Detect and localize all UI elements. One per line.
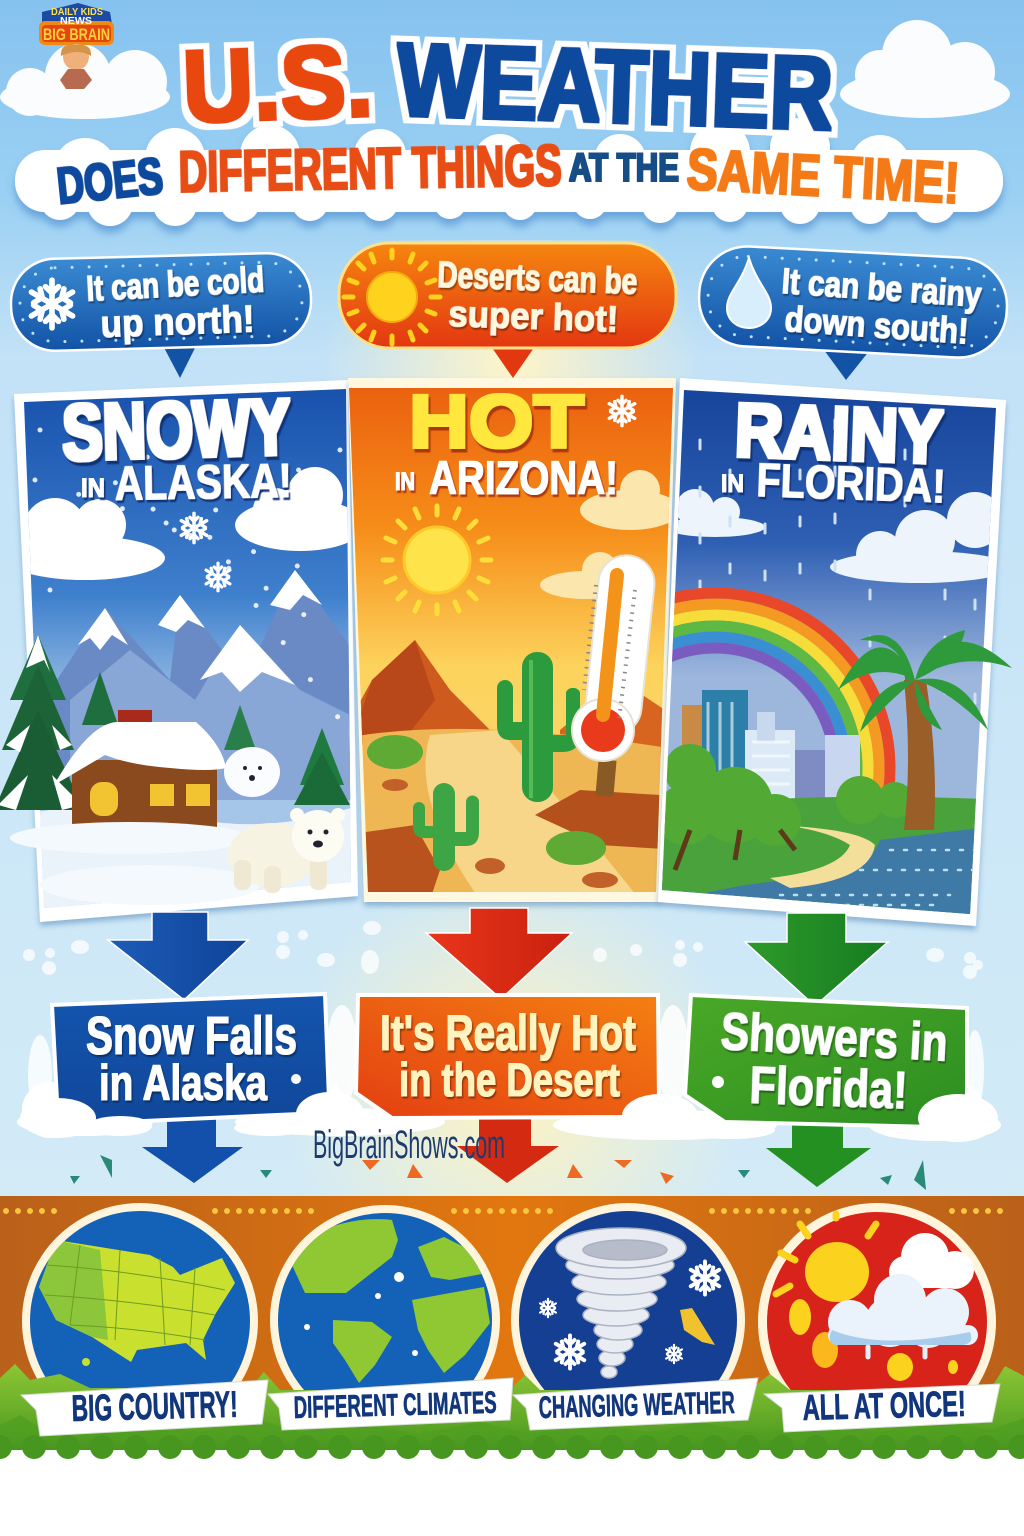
speech bubble: deserts super hot: Deserts can be (437, 254, 638, 302)
logo: Daily Kids News with Big Brain: DAILY KIDS (51, 7, 103, 18)
leaves and shards (70, 1155, 926, 1190)
panel title: ALASKA! (114, 455, 292, 511)
tornado funnel (556, 1228, 686, 1378)
big cactus (497, 652, 580, 802)
panel: rainy in Florida (654, 378, 1012, 933)
icon: small clover (712, 1076, 724, 1088)
subtitle (54, 133, 961, 216)
ribbon: big country: BIG COUNTRY! (71, 1384, 238, 1429)
panel: snowy in Alaska (0, 380, 365, 922)
logo: Daily Kids News with Big Brain: NEWS (60, 16, 92, 27)
rainbow (662, 588, 896, 904)
banner: showers in Florida: Showers in (719, 1002, 949, 1073)
banner: snow falls in Alaska: in Alaska (99, 1055, 268, 1111)
arrow: green down (745, 913, 888, 1006)
snowflakes (181, 513, 230, 591)
ribbon: changing weather (513, 1378, 758, 1430)
subtitle: DIFFERENT THINGS (178, 133, 562, 205)
arrow: blue down (108, 912, 248, 1000)
panel title: IN (81, 473, 105, 503)
house (54, 710, 226, 828)
speech bubble: deserts super hot (339, 243, 676, 378)
watermark: BigBrainShows.com (313, 1123, 505, 1167)
panel: hot in Arizona (345, 378, 680, 902)
banner: really hot in the desert (356, 995, 659, 1118)
bushes (367, 735, 606, 865)
badge: USA map (22, 1203, 258, 1388)
icon: snowflake (31, 280, 73, 328)
ground (662, 797, 976, 914)
icon: water drop (727, 258, 771, 328)
ribbon: all at once (764, 1383, 1000, 1432)
panel title (721, 388, 946, 513)
logo: Daily Kids News with Big Brain: BIG BRAIN (43, 25, 110, 44)
clouds (665, 489, 1010, 583)
flakes and debris (691, 1262, 719, 1294)
title: WEATHER (395, 22, 835, 152)
panel title: FLORIDA! (756, 453, 946, 513)
clouds (828, 1233, 978, 1357)
decorative paw-like snow puffs (23, 921, 983, 979)
panel title: SNOWY (61, 382, 291, 477)
panel title (395, 380, 618, 504)
banner: snow falls in Alaska: Snow Falls (86, 1006, 297, 1066)
title: U.S. (181, 23, 375, 144)
arrow: green lower (766, 1118, 871, 1187)
banner: showers in Florida (685, 995, 967, 1127)
panel title: IN (721, 470, 744, 498)
snow mounds (10, 822, 260, 905)
trees (0, 635, 350, 810)
falling snow (35, 420, 340, 720)
banner: showers in Florida: Florida! (749, 1056, 909, 1121)
ribbon: different climates (268, 1378, 513, 1430)
panel title (61, 382, 292, 511)
speech bubble: cold up north (10, 252, 312, 378)
subtitle cloud (15, 118, 1003, 226)
palm tree (838, 630, 1012, 830)
banner: really hot in the desert: It's Really Hot (380, 1005, 636, 1061)
left top cloud (0, 43, 170, 119)
rocks (366, 825, 440, 892)
ribbon: big country (21, 1380, 268, 1436)
cloud behind banners (17, 1005, 1001, 1142)
badge: all at once (758, 1203, 996, 1441)
mountains (360, 640, 490, 745)
trees and bushes (655, 744, 913, 846)
badge: world globe (270, 1205, 500, 1390)
banner: snow falls in Alaska (52, 994, 329, 1123)
mountains (30, 570, 360, 800)
river (703, 828, 974, 914)
city (682, 690, 860, 805)
panel title: HOT (409, 380, 584, 463)
panel title: IN (395, 468, 415, 496)
icon: sun (383, 506, 491, 614)
speech bubble: rainy down south (697, 244, 1009, 380)
speech bubble: cold up north: It can be cold (85, 259, 265, 309)
sun (776, 1214, 958, 1381)
badge: tornado (511, 1203, 745, 1437)
subtitle: SAME TIME! (685, 137, 961, 216)
arrow: blue lower (142, 1115, 243, 1183)
bottom band (0, 1196, 1024, 1406)
rain (698, 418, 976, 704)
arrow: red down (426, 908, 572, 999)
clouds (28, 467, 348, 580)
icon: sun (344, 250, 440, 344)
arrow: red lower (457, 1115, 559, 1183)
cloud front of banners (20, 1092, 998, 1142)
ribbon: different climates: DIFFERENT CLIMATES (293, 1385, 497, 1425)
subtitle: DOES (54, 147, 166, 216)
thermometer (572, 553, 657, 797)
ribbon: changing weather: CHANGING WEATHER (538, 1385, 735, 1425)
panel title: RAINY (733, 388, 944, 480)
right top cloud (840, 20, 1010, 118)
banner: really hot in the desert: in the Desert (399, 1053, 620, 1106)
panel title: ARIZONA! (429, 451, 618, 504)
grass strip (0, 1364, 1024, 1450)
speech bubble: rainy down south: It can be rainy (780, 260, 983, 315)
snow ground (40, 808, 351, 908)
speech bubble: cold up north: up north! (100, 299, 255, 346)
sky background (0, 0, 1024, 1200)
logo: Daily Kids News with Big Brain (39, 3, 114, 89)
title (181, 22, 835, 152)
speech bubble: deserts super hot: super hot! (448, 293, 619, 340)
icon: snowflake sticker (609, 396, 635, 426)
icon: small star (291, 1074, 301, 1084)
cream clouds (540, 470, 680, 599)
speech bubble: rainy down south: down south! (783, 298, 970, 352)
polar bears (224, 747, 345, 893)
small cactus (413, 783, 479, 871)
desert ground (362, 728, 661, 892)
subtitle: AT THE (569, 146, 679, 190)
